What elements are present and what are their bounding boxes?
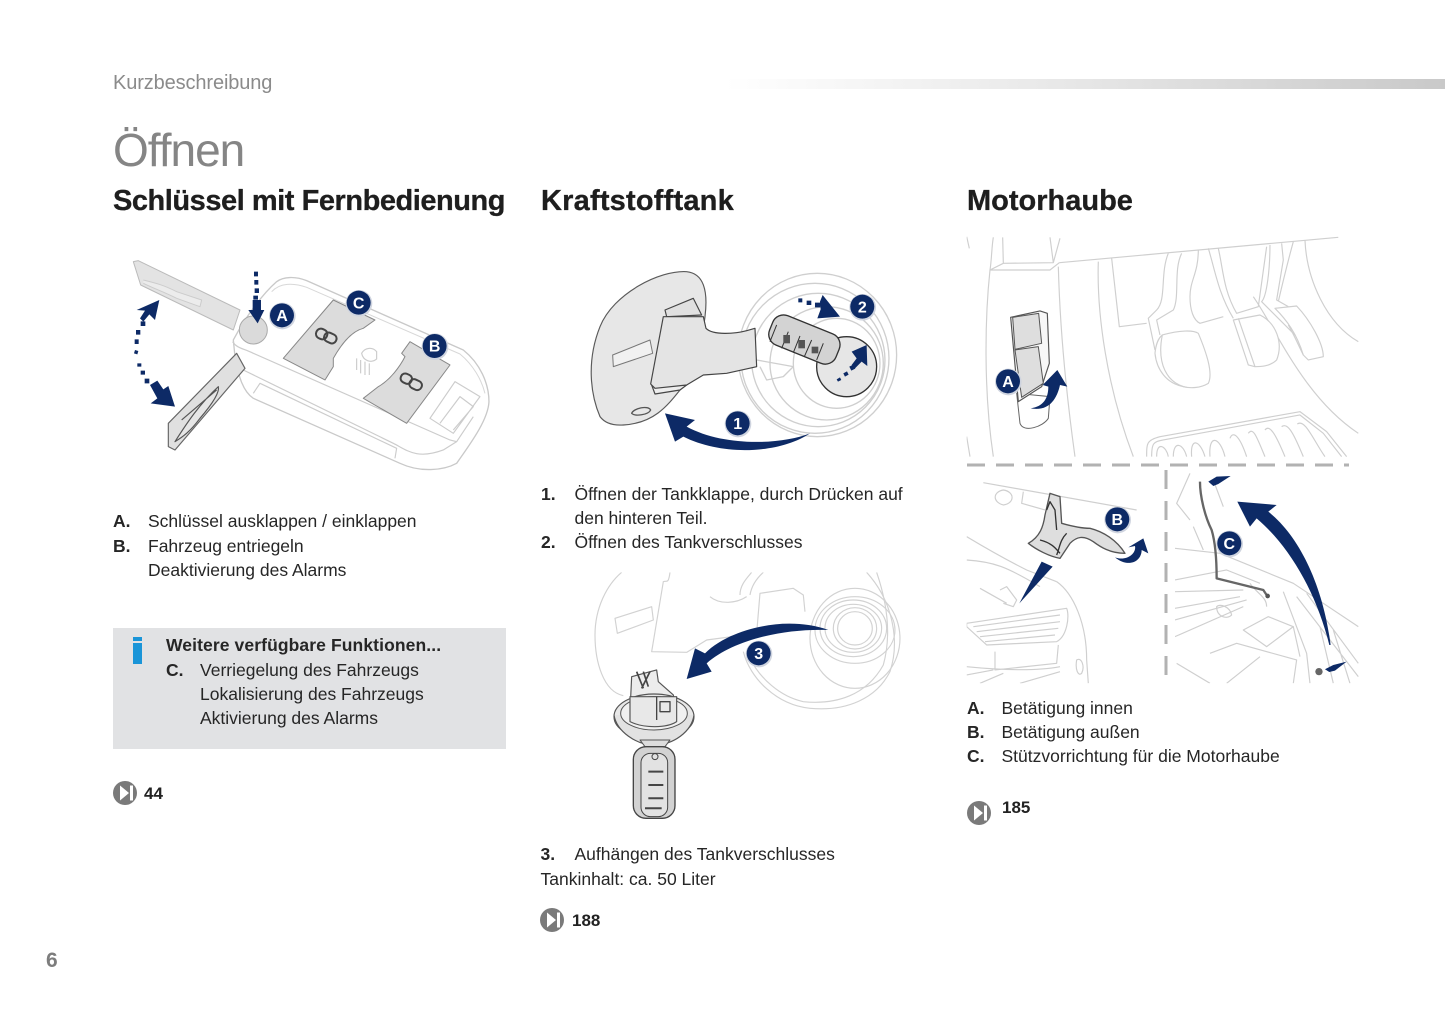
vertical dashed divider [1164,470,1168,684]
badge 2 [849,294,876,321]
badge 1 [725,411,751,437]
icon: reference 44 [113,781,137,805]
pointer wedge [1019,562,1053,603]
badge A: A [1002,374,1014,391]
illustration: opening the fuel flap [591,272,897,450]
arrow: raise bonnet [1237,502,1331,645]
section label: Kurzbeschreibung [113,72,272,94]
page number: 6 [46,949,58,972]
panel list: C. [166,660,184,680]
illustration: bonnet stay [1175,473,1358,683]
badge C: C [353,295,365,312]
arrow: top stay point [1208,476,1231,486]
heading: key: Schlüssel mit Fernbedienung [113,185,505,217]
arrows [665,295,867,450]
icon: info [133,637,142,664]
key legend [113,511,417,580]
fuel tank step 3: 3. [540,844,555,864]
badge C [1216,531,1243,557]
fuel tank steps 1-2: Öffnen der Tankklappe, durch Drücken auf [574,484,903,504]
panel list: Aktivierung des Alarms [200,708,378,728]
bonnet legend: Stützvorrichtung für die Motorhaube [1002,746,1280,766]
arrow: cap to flap [687,624,828,679]
bonnet legend: Betätigung außen [1002,722,1140,742]
fuel tank steps 1-2: 1. [541,484,556,504]
illustration: interior release lever [967,237,1358,457]
illustration: outside bonnet catch [967,483,1148,683]
bonnet legend: C. [967,746,984,766]
fuel tank steps 1-2: den hinteren Teil. [574,508,707,528]
heading: fuel tank: Kraftstofftank [541,185,734,217]
page reference 188: 188 [572,911,600,930]
badge B: B [429,339,440,356]
arrow: lift catch [1115,538,1148,563]
fuel tank step 3 [540,844,835,888]
bonnet legend: Betätigung innen [1002,698,1133,718]
horizontal dashed divider [967,464,1349,466]
badge A: A [276,308,288,325]
badge C [346,290,372,317]
fuel tank steps 1-2: Öffnen des Tankverschlusses [574,532,802,552]
panel list: Verriegelung des Fahrzeugs [200,660,419,680]
icon: reference 188 [540,908,564,932]
badge 2: 2 [858,299,867,316]
key legend: Fahrzeug entriegeln [148,536,304,556]
badge 3: 3 [754,646,763,663]
badge A [995,369,1022,395]
illustration: hanging the fuel cap [595,572,900,818]
badge C: C [1224,536,1236,553]
bonnet legend: B. [967,722,984,742]
header gradient bar [725,79,1445,89]
illustration: key fob [133,261,489,470]
bonnet legend: A. [967,698,984,718]
page reference 44: 44 [144,784,163,803]
heading: bonnet: Motorhaube [967,185,1133,217]
panel list: Lokalisierung des Fahrzeugs [200,684,424,704]
fuel tank step 3: Aufhängen des Tankverschlusses [574,844,835,864]
icon: reference 185 [967,801,991,825]
bonnet legend [967,698,1280,766]
key legend: A. [113,511,130,531]
arrow: press button A [134,272,264,407]
badge 3 [746,641,772,667]
key legend: Deaktivierung des Alarms [148,560,346,580]
fuel tank steps 1-2 [541,484,903,552]
badge B [1104,507,1131,533]
panel list [166,660,424,728]
badge A [269,303,296,329]
badge B [422,333,448,360]
fuel tank steps 1-2: 2. [541,532,556,552]
page title: Öffnen [113,124,244,176]
fuel tank step 3: Tankinhalt: ca. 50 Liter [540,868,716,888]
page reference 185: 185 [1002,798,1030,817]
arrow: bottom stay point [1325,662,1347,672]
arrow: pull lever [1031,370,1067,409]
badge 1: 1 [733,416,742,433]
panel: further functions [113,628,506,749]
key legend: Schlüssel ausklappen / einklappen [148,511,417,531]
panel heading: Weitere verfügbare Funktionen... [166,635,441,655]
key legend: B. [113,536,130,556]
badge B: B [1112,512,1123,529]
